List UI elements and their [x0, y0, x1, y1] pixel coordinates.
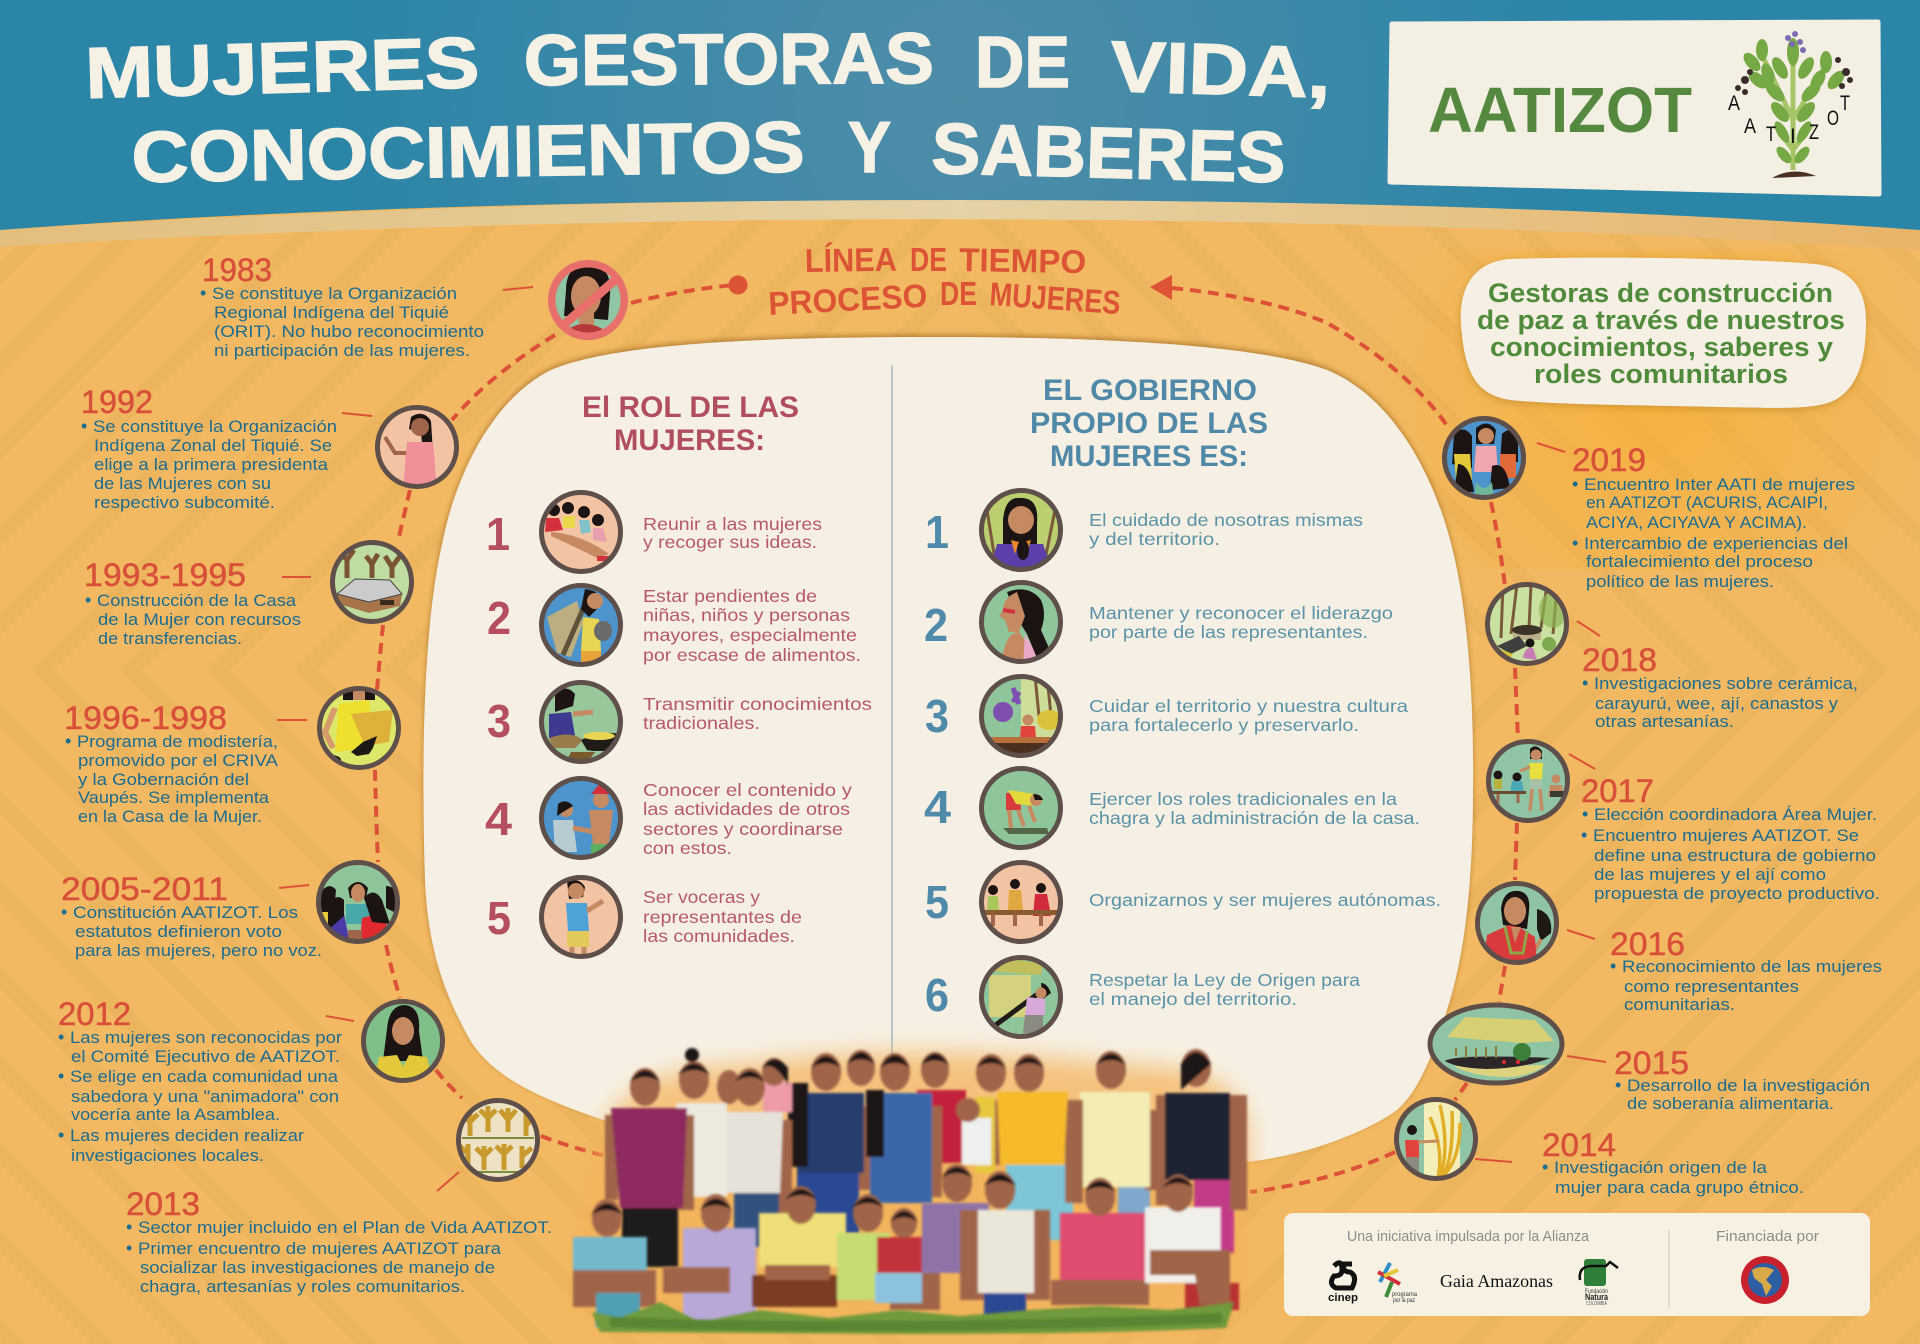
entry 1992: respectivo subcomité.	[94, 494, 275, 512]
heading: línea de tiempo: PROCESO	[767, 277, 928, 322]
entry 2015: •	[1615, 1075, 1621, 1095]
entry 2013: Sector mujer incluido en el Plan de Vida AATIZOT.	[138, 1219, 552, 1237]
rol item 2: Estar pendientes de	[643, 586, 817, 606]
logo: programa por la paz	[1378, 1263, 1418, 1304]
central divider	[891, 365, 893, 1060]
gobierno item 3: para fortalecerlo y preservarlo.	[1089, 715, 1359, 735]
entry 2016: Reconocimiento de las mujeres	[1622, 958, 1882, 976]
entry 1996-1998: 1996-1998	[64, 700, 227, 736]
icon: plant logo: A	[1728, 92, 1740, 115]
icon: 1983 prohibited portrait	[546, 258, 630, 342]
logo: cinep	[1328, 1263, 1358, 1304]
entry 2013: •	[126, 1217, 132, 1237]
entry 1993-1995: de la Mujer con recursos	[98, 611, 301, 629]
heading: el rol	[582, 391, 799, 457]
timeline connector ticks	[277, 287, 1606, 1191]
entry 1992: elige a la primera presidenta	[94, 456, 329, 474]
entry 1983: (ORIT). No hubo reconocimiento	[214, 323, 484, 341]
entry 1993-1995: •	[85, 590, 91, 610]
icon: 2012 woman in yellow	[361, 999, 445, 1083]
icon: 1993 house among trees	[330, 540, 414, 624]
heading: gobierno propio: PROPIO DE LAS	[1030, 407, 1268, 440]
heading: línea de tiempo: TIEMPO	[959, 241, 1087, 280]
rol item 1: y recoger sus ideas.	[643, 532, 817, 552]
entry 2013: socializar las investigaciones de manejo de	[140, 1259, 495, 1277]
entry 1993-1995: Construcción de la Casa	[97, 592, 297, 610]
title: DE	[975, 23, 1070, 103]
title: GESTORAS	[524, 19, 934, 101]
rol item 5: Ser voceras y	[643, 887, 760, 907]
rol item 4: sectores y coordinarse	[643, 819, 843, 839]
rol item 2: mayores, especialmente	[643, 625, 857, 645]
icon: plant logo	[1728, 31, 1853, 178]
entry 1993-1995: 1993-1995	[84, 557, 246, 593]
entry 1996-1998: y la Gobernación del	[78, 771, 249, 789]
entry 1992: Se constituye la Organización	[93, 418, 337, 436]
entry 2016: comunitarias.	[1624, 996, 1735, 1014]
rol item 5: las comunidades.	[643, 926, 795, 946]
gobierno item 5: Organizarnos y ser mujeres autónomas.	[1089, 890, 1441, 910]
entry 2019: •	[1572, 533, 1578, 553]
back row of women	[605, 1048, 1247, 1275]
entry 1983: ni participación de las mujeres.	[214, 342, 470, 360]
entry 2013: •	[126, 1238, 132, 1258]
rol item 2	[487, 583, 861, 667]
icon: plant logo: T	[1840, 92, 1850, 115]
gobierno item 1: El cuidado de nosotras mismas	[1089, 510, 1363, 530]
logo: Gaia Amazonas: Gaia Amazonas	[1440, 1271, 1553, 1291]
rol item 1	[486, 490, 822, 574]
icon: 1992 woman	[375, 405, 459, 489]
entry 2017: •	[1581, 825, 1587, 845]
rol item 4: con estos.	[643, 838, 732, 858]
entry 1996-1998: Vaupés. Se implementa	[78, 789, 270, 807]
entry 2005-2011: estatutos definieron voto	[75, 923, 282, 941]
entry 2017: de las mujeres y el ají como	[1594, 866, 1826, 884]
rol item 2: 2	[487, 592, 511, 644]
entry 1983: 1983	[202, 252, 272, 288]
entry 2015	[1614, 1045, 1870, 1113]
logo: cinep: cinep	[1328, 1292, 1358, 1304]
entry 2013: chagra, artesanías y roles comunitarios.	[140, 1278, 465, 1296]
entry 2012: •	[58, 1066, 64, 1086]
rol item 5: representantes de	[643, 907, 802, 927]
entry 2012: Se elige en cada comunidad una	[70, 1068, 339, 1086]
entry 2013	[126, 1186, 552, 1296]
entry 2012: •	[58, 1027, 64, 1047]
icon: 2018 forest and pottery	[1485, 582, 1569, 666]
gobierno item 5: 5	[925, 876, 949, 928]
rol item 3: tradicionales.	[643, 713, 760, 733]
gobierno item 2: Mantener y reconocer el liderazgo	[1089, 603, 1393, 623]
entry 2012: Las mujeres deciden realizar	[70, 1127, 305, 1145]
entry 2015: 2015	[1614, 1045, 1689, 1081]
entry 2018: 2018	[1582, 642, 1657, 678]
entry 2017	[1581, 773, 1880, 903]
credits panel	[1284, 1213, 1870, 1316]
callout: gestoras de construcción de paz: conocimientos, saberes y	[1490, 332, 1833, 362]
entry 2013: 2013	[126, 1186, 200, 1222]
heading: el rol: El ROL DE LAS	[582, 391, 799, 424]
entry 2005-2011: 2005-2011	[61, 871, 228, 907]
entry 2014: 2014	[1542, 1127, 1616, 1163]
rol item 2: niñas, niños y personas	[643, 605, 850, 625]
photo glow	[570, 1052, 1248, 1335]
heading: gobierno propio: MUJERES ES:	[1050, 440, 1248, 473]
credits: funder label: Financiada por	[1716, 1228, 1819, 1245]
entry 2012: el Comité Ejecutivo de AATIZOT.	[71, 1048, 340, 1066]
entry 2012: vocería ante la Asamblea.	[71, 1106, 280, 1124]
gobierno item 1: y del territorio.	[1089, 529, 1220, 549]
entry 2018	[1582, 642, 1858, 731]
heading: gobierno propio: EL GOBIERNO	[1043, 374, 1257, 407]
logo: Inter-American Foundation globe	[1741, 1256, 1789, 1304]
rol item 3	[487, 680, 872, 764]
entry 1992: Indígena Zonal del Tiquié. Se	[94, 437, 332, 455]
entry 1992: 1992	[81, 384, 153, 420]
entry 2012: investigaciones locales.	[71, 1147, 264, 1165]
gobierno item 3: Cuidar el territorio y nuestra cultura	[1089, 696, 1408, 716]
entry 1992	[81, 384, 337, 512]
title: MUJERES	[84, 23, 480, 114]
entry 2019: •	[1572, 474, 1578, 494]
heading: línea de tiempo: DE	[940, 275, 977, 312]
entry 2017: •	[1582, 804, 1588, 824]
logo: programa por la paz: programa	[1392, 1292, 1418, 1298]
icon: plant logo: O	[1827, 107, 1839, 130]
heading: línea de tiempo: LÍNEA	[805, 241, 897, 279]
icon: 2005 group of women	[316, 860, 400, 944]
rol item 2: por escase de alimentos.	[643, 645, 861, 665]
entry 2005-2011: •	[61, 902, 67, 922]
gobierno item 2: 2	[924, 599, 948, 651]
credits: alliance label: Una iniciativa impulsada por la Alianza	[1347, 1228, 1590, 1245]
entry 2016: 2016	[1610, 926, 1685, 962]
entry 2005-2011: Constitución AATIZOT. Los	[73, 904, 298, 922]
rol item 1: Reunir a las mujeres	[643, 514, 822, 534]
gobierno item 4: chagra y la administración de la casa.	[1089, 808, 1420, 828]
logo: Fundación Natura: Fundación	[1585, 1289, 1608, 1295]
icon: plant logo: Z	[1809, 121, 1819, 144]
heading: línea de tiempo: DE	[910, 241, 947, 278]
entry 1983: Se constituye la Organización	[212, 285, 457, 303]
entry 2019: político de las mujeres.	[1586, 573, 1774, 591]
icon: plant logo: I	[1790, 125, 1796, 148]
entry 1992: •	[81, 416, 87, 436]
entry 2012: sabedora y una "animadora" con	[71, 1088, 339, 1106]
entry 2014: mujer para cada grupo étnico.	[1555, 1179, 1804, 1197]
entry 2013: Primer encuentro de mujeres AATIZOT para	[138, 1240, 502, 1258]
heading: el rol: MUJERES:	[614, 424, 765, 457]
entry 1993-1995: de transferencias.	[98, 630, 242, 648]
entry 2018: Investigaciones sobre cerámica,	[1594, 675, 1858, 693]
gobierno item 1	[925, 488, 1363, 572]
gobierno item 6: el manejo del territorio.	[1089, 989, 1297, 1009]
rol item 5	[487, 875, 802, 959]
entry 2012	[58, 996, 343, 1165]
gobierno item 6: 6	[925, 969, 949, 1021]
entry 2016	[1610, 926, 1882, 1014]
heading: gobierno propio	[1030, 374, 1268, 473]
gobierno item 2	[924, 580, 1393, 664]
entry 2017: Elección coordinadora Área Mujer.	[1594, 805, 1877, 824]
timeline dashed path	[375, 285, 1518, 1192]
timeline arrow head	[1150, 275, 1172, 300]
entry 2019: 2019	[1572, 442, 1646, 478]
rol item 5: 5	[487, 892, 511, 944]
entry 2019: en AATIZOT (ACURIS, ACAIPI,	[1586, 494, 1828, 512]
column: el rol de las mujeres	[485, 391, 872, 959]
icon: 2014 woman with plant	[1394, 1097, 1478, 1181]
entry 1983: •	[200, 283, 206, 303]
entry 2019: Intercambio de experiencias del	[1584, 535, 1848, 553]
icon: plant logo: A	[1744, 115, 1756, 138]
central cream panel	[423, 337, 1473, 1162]
callout: gestoras de construcción de paz	[1461, 258, 1866, 408]
entry 2005-2011: para las mujeres, pero no voz.	[75, 942, 322, 960]
logo: programa por la paz: por la paz	[1393, 1298, 1415, 1304]
entry 2016: •	[1610, 956, 1616, 976]
icon: 2016 woman leader	[1475, 881, 1559, 965]
entry 1992: de las Mujeres con su	[94, 475, 271, 493]
entry 2019: ACIYA, ACIYAVA Y ACIMA).	[1586, 514, 1807, 532]
entry 1996-1998: en la Casa de la Mujer.	[78, 808, 262, 826]
rol item 4: las actividades de otros	[643, 799, 850, 819]
logo: Fundación Natura: Natura	[1585, 1292, 1609, 1302]
icon: 1996 sewing woman	[317, 686, 401, 770]
logo panel: AATIZOT	[1390, 22, 1879, 194]
callout: gestoras de construcción de paz: de paz a través de nuestros	[1477, 305, 1845, 335]
entry 1983	[200, 252, 484, 360]
heading: línea de tiempo	[767, 241, 1122, 322]
callout: gestoras de construcción de paz: Gestoras de construcción	[1488, 278, 1833, 308]
rol item 3: Transmitir conocimientos	[643, 694, 872, 714]
entry 2012: •	[58, 1125, 64, 1145]
icon: 2017 meeting of women	[1486, 739, 1570, 823]
entry 1983: Regional Indígena del Tiquié	[214, 304, 449, 322]
entry 1996-1998: Programa de modistería,	[77, 733, 278, 751]
entry 2019: Encuentro Inter AATI de mujeres	[1584, 476, 1855, 494]
entry 2012: 2012	[58, 996, 131, 1032]
rol item 4: Conocer el contenido y	[643, 780, 852, 800]
gobierno item 5	[925, 860, 1441, 944]
header: blue curved banner	[0, 0, 1920, 250]
entry 2017: define una estructura de gobierno	[1594, 847, 1876, 865]
rol item 4: 4	[485, 793, 512, 845]
callout: gestoras de construcción de paz: roles comunitarios	[1534, 359, 1788, 389]
entry 2015: Desarrollo de la investigación	[1627, 1077, 1870, 1095]
icon: 2013 crop field	[456, 1098, 540, 1182]
rol item 3: 3	[487, 695, 511, 747]
entry 2018: carayurú, wee, ají, canastos y	[1595, 695, 1839, 713]
icon: 2015 thatched garden	[1426, 1002, 1566, 1086]
entry 2014	[1542, 1127, 1804, 1197]
heading: línea de tiempo: MUJERES	[989, 275, 1122, 321]
gobierno item 6: Respetar la Ley de Origen para	[1089, 970, 1360, 990]
entry 1996-1998: promovido por el CRIVA	[78, 752, 278, 770]
gobierno item 3	[925, 674, 1408, 759]
entry 1993-1995	[84, 557, 301, 648]
title: SABERES	[931, 109, 1287, 198]
entry 1996-1998	[64, 700, 278, 826]
entry 1996-1998: •	[65, 731, 71, 751]
entry 2012: Las mujeres son reconocidas por	[70, 1029, 343, 1047]
gobierno item 2: por parte de las representantes.	[1089, 622, 1368, 642]
entry 2015: de soberanía alimentaria.	[1627, 1095, 1834, 1113]
gobierno item 4	[924, 766, 1420, 850]
title	[84, 19, 1332, 198]
entry 2018: •	[1582, 673, 1588, 693]
grass	[592, 1302, 1234, 1334]
entry 2017: propuesta de proyecto productivo.	[1594, 885, 1880, 903]
icon: 2019 women circle	[1442, 416, 1526, 500]
column: el gobierno propio	[924, 374, 1441, 1039]
entry 2017: Encuentro mujeres AATIZOT. Se	[1593, 827, 1859, 845]
entry 2019: fortalecimiento del proceso	[1586, 553, 1813, 571]
rol item 1: 1	[486, 508, 510, 560]
gobierno item 1: 1	[925, 506, 949, 558]
title: Y	[848, 108, 891, 188]
logo: Fundación Natura: COLOMBIA	[1586, 1301, 1608, 1307]
entry 2017: 2017	[1581, 773, 1654, 809]
gobierno item 6	[925, 955, 1360, 1039]
entry 2014: Investigación origen de la	[1554, 1159, 1768, 1177]
logo: Fundación Natura	[1580, 1259, 1618, 1307]
gobierno item 4: 4	[924, 781, 951, 833]
entry 2018: otras artesanías.	[1595, 713, 1734, 731]
gobierno item 3: 3	[925, 690, 949, 742]
photo: group of women	[570, 1048, 1248, 1335]
rol item 4	[485, 776, 852, 860]
title: CONOCIMIENTOS	[131, 107, 805, 198]
entry 2019	[1572, 442, 1855, 591]
entry 2016: como representantes	[1624, 978, 1799, 996]
timeline start dot	[728, 276, 748, 294]
logo wordmark: AATIZOT	[1428, 74, 1692, 146]
icon: plant logo: T	[1766, 123, 1776, 146]
entry 2014: •	[1542, 1157, 1548, 1177]
title: VIDA,	[1110, 27, 1332, 114]
front row of women	[573, 1164, 1239, 1327]
gobierno item 4: Ejercer los roles tradicionales en la	[1089, 789, 1397, 809]
entry 2005-2011	[61, 871, 322, 960]
